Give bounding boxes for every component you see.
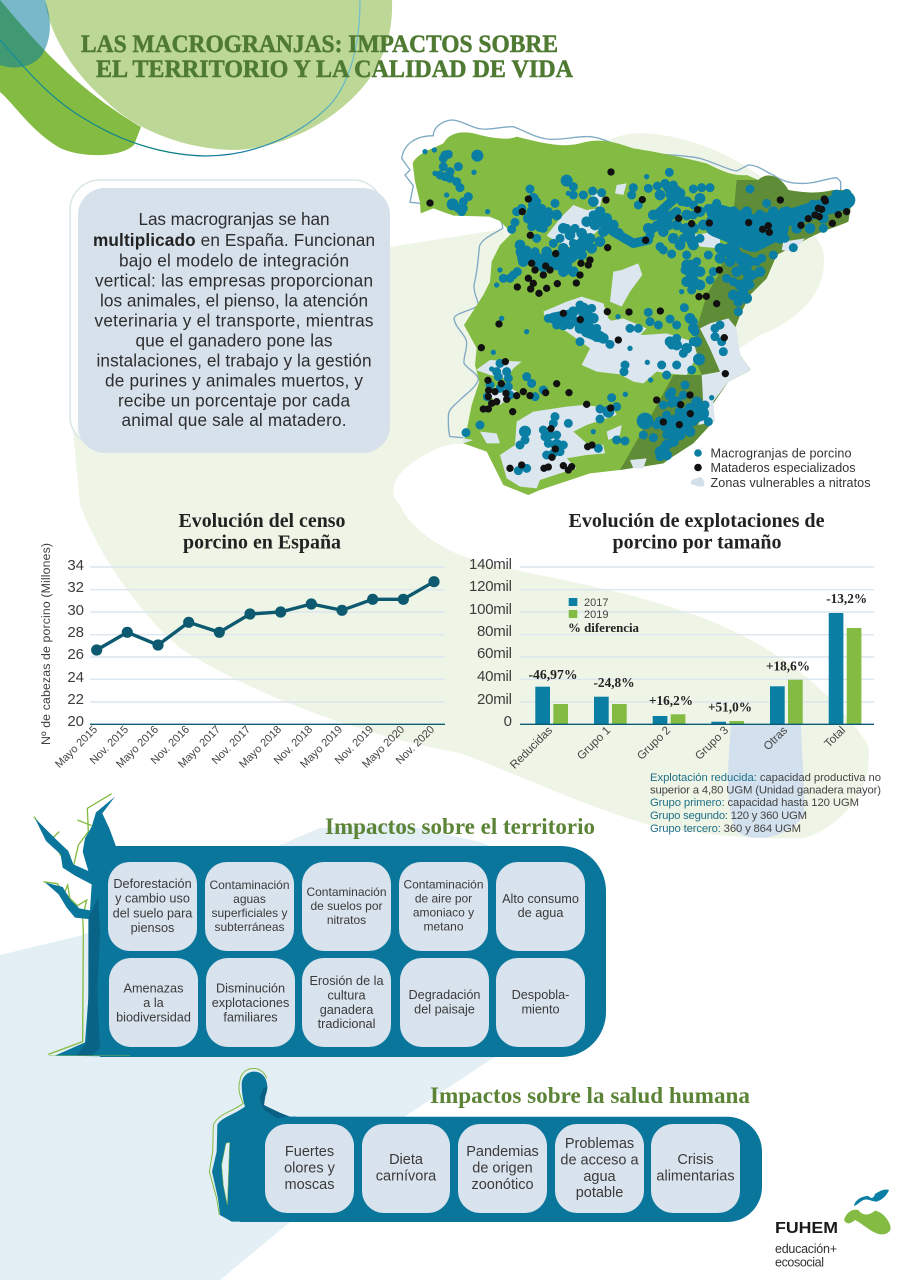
card <box>109 958 198 1047</box>
logo: FUHEM: ecosocial <box>775 1256 824 1270</box>
panel: intro text: bajo el modelo de integración <box>119 250 349 270</box>
y axis labels: 120mil <box>469 578 512 595</box>
heading: impacts on human health: Impactos sobre la salud humana <box>430 1083 750 1109</box>
title: LAS MACROGRANJAS: IMPACTOS SOBRE <box>81 29 558 58</box>
map: slaughterhouse dots <box>430 172 847 470</box>
card <box>399 862 488 951</box>
card <box>108 862 197 951</box>
x axis labels: Total <box>822 725 848 750</box>
card: agua <box>583 1169 617 1185</box>
x axis labels: Nov. 2018 <box>272 724 315 767</box>
card: de aire por <box>415 892 472 906</box>
percentage labels: +51,0% <box>708 700 752 716</box>
card: tradicional <box>318 1017 375 1031</box>
map: coast line <box>402 120 841 438</box>
bar chart heading: Evolución de explotaciones de <box>568 510 825 532</box>
icon: logo mark <box>844 1189 891 1234</box>
y axis labels: 100mil <box>469 601 512 618</box>
card <box>400 958 489 1047</box>
y axis labels: 40mil <box>477 668 512 685</box>
y axis labels: 34 <box>67 557 84 574</box>
card: familiares <box>223 1011 278 1025</box>
y axis labels: 0 <box>504 713 512 730</box>
legend: 2017 <box>584 597 608 609</box>
title <box>81 29 574 83</box>
card: del paisaje <box>414 1002 475 1016</box>
line chart heading: Evolución del censo <box>178 510 346 532</box>
card: zoonótico <box>471 1177 534 1193</box>
line chart: pig census <box>39 543 445 771</box>
card <box>496 862 585 951</box>
x axis labels: Nov. 2019 <box>333 724 376 767</box>
card: de origen <box>472 1161 533 1177</box>
background: pale green blob <box>73 133 869 838</box>
card <box>651 1124 740 1213</box>
card: a la <box>143 996 165 1010</box>
panel: intro text: de purines y animales muertos, y <box>105 370 363 390</box>
card <box>555 1124 644 1213</box>
card: Contaminación <box>403 878 484 892</box>
percentage labels: -24,8% <box>594 676 634 691</box>
percentage labels: +16,2% <box>649 694 693 709</box>
definitions note: superior a 4,80 UGM (Unidad ganadera mayor) <box>650 784 881 796</box>
card: superficiales y <box>211 906 288 920</box>
card: carnívora <box>376 1169 437 1185</box>
card: subterráneas <box>214 920 285 934</box>
card: piensos <box>131 921 174 935</box>
card: de agua <box>518 906 564 920</box>
y axis labels: 20 <box>67 713 84 730</box>
logo: FUHEM: FUHEM <box>775 1220 838 1237</box>
y axis labels: 26 <box>67 646 84 663</box>
card: Degradación <box>409 988 480 1002</box>
card: olores y <box>284 1161 336 1177</box>
bars <box>535 613 843 724</box>
y axis labels: 140mil <box>469 556 512 573</box>
definitions note <box>650 772 881 835</box>
card: Fuertes <box>285 1144 334 1160</box>
card: nitratos <box>327 913 366 927</box>
card <box>496 958 585 1047</box>
y axis labels <box>469 556 512 730</box>
card: miento <box>521 1002 560 1016</box>
x axis labels: Grupo 1 <box>575 725 613 763</box>
x axis labels: Nov. 2015 <box>88 724 131 767</box>
card: Erosión de la <box>309 974 384 988</box>
x axis labels: Mayo 2018 <box>237 724 284 771</box>
card: Contaminación <box>306 885 387 899</box>
card: Pandemias <box>466 1144 539 1160</box>
card: alimentarias <box>656 1169 735 1185</box>
y axis labels: 20mil <box>477 691 512 708</box>
panel: intro text: animal que sale al matadero. <box>122 410 346 430</box>
card: Amenazas <box>124 982 183 996</box>
card: Problemas <box>565 1136 634 1152</box>
y axis labels: 80mil <box>477 623 512 640</box>
y axis labels: 28 <box>67 624 84 641</box>
panel: intro text: recibe un porcentaje por cada <box>118 390 350 410</box>
percentage labels: -13,2% <box>826 592 867 607</box>
y axis labels: 30 <box>67 602 84 619</box>
x axis labels <box>508 724 848 772</box>
card: explotaciones <box>212 996 289 1010</box>
definitions note: Grupo segundo: 120 y 360 UGM <box>650 810 807 822</box>
data line <box>91 576 440 656</box>
card: de suelos por <box>310 899 383 913</box>
bar chart: farms by size <box>469 556 874 772</box>
percentage labels: +18,6% <box>766 660 810 674</box>
panel: impacts on human health <box>209 1068 762 1222</box>
x axis labels: Nov. 2016 <box>149 724 192 767</box>
y axis labels <box>67 557 84 730</box>
map: Spain macrofarms <box>402 120 853 495</box>
card <box>206 958 295 1047</box>
y axis labels: 60mil <box>477 645 512 662</box>
map: macrofarm mass <box>425 150 847 471</box>
map: nitrate zones <box>463 183 805 488</box>
card: moscas <box>285 1177 334 1193</box>
card <box>458 1124 547 1213</box>
card <box>265 1124 354 1213</box>
panel: intro text: que el ganadero pone las <box>136 330 332 350</box>
panel: intro text: multiplicado en España. Funcionan <box>93 230 375 250</box>
card: potable <box>576 1185 623 1201</box>
map: macrofarm dots <box>440 154 847 471</box>
panel: intro text: vertical: las empresas proporcionan <box>95 270 373 290</box>
definitions note: Explotación reducida: capacidad productiva no <box>650 772 881 784</box>
map: darker green zone <box>620 176 853 470</box>
x axis labels: Nov. 2020 <box>394 724 437 767</box>
card: aguas <box>233 892 266 906</box>
y axis labels: 32 <box>67 579 84 596</box>
card: Deforestación <box>113 877 192 891</box>
x axis labels: Mayo 2017 <box>176 724 223 771</box>
background: pale blue blob <box>0 824 605 1280</box>
panel: intro text: veterinaria y el transporte, mientras <box>94 310 374 330</box>
card: Alto consumo <box>502 892 579 906</box>
card: y cambio uso <box>115 892 190 906</box>
line chart heading <box>178 510 346 554</box>
card: del suelo para <box>113 906 193 920</box>
title: EL TERRITORIO Y LA CALIDAD DE VIDA <box>96 54 574 83</box>
card <box>205 862 294 951</box>
card: Dieta <box>389 1152 423 1168</box>
card: amoniaco y <box>413 906 474 920</box>
map: land <box>413 132 853 495</box>
panel: intro text: los animales, el pienso, la atención <box>100 290 368 310</box>
panel: intro text: Las macrogranjas se han <box>138 209 330 229</box>
card: de acceso a <box>560 1152 640 1168</box>
x axis labels: Nov. 2017 <box>210 724 253 767</box>
x axis labels: Reducidas <box>508 724 555 772</box>
panel: impacts on territory <box>34 794 606 1057</box>
x axis labels <box>53 724 437 771</box>
card: metano <box>423 920 464 934</box>
panel: intro text: instalaciones, el trabajo y la gestión <box>96 350 372 370</box>
bar chart heading <box>568 510 825 554</box>
decoration: blue wave under bar chart <box>728 725 804 838</box>
y axis labels: 22 <box>67 691 84 708</box>
x axis labels: Grupo 3 <box>693 725 731 763</box>
icon: dead tree <box>34 794 130 1057</box>
legend: % diferencia <box>568 620 639 635</box>
card: Crisis <box>677 1152 714 1168</box>
card: ganadera <box>320 1003 374 1017</box>
card: Disminución <box>216 982 285 996</box>
card <box>302 958 391 1047</box>
x axis labels: Otras <box>762 724 790 753</box>
x axis labels: Mayo 2016 <box>114 724 161 771</box>
icon: human silhouette <box>209 1068 297 1222</box>
card: Despobla- <box>512 988 569 1002</box>
x axis labels: Grupo 2 <box>635 725 673 763</box>
map legend: Macrogranjas de porcino <box>710 446 852 460</box>
decoration: header blobs <box>0 0 392 156</box>
y axis title: Nº de cabezas de porcino (Millones) <box>39 543 53 745</box>
legend <box>568 597 639 635</box>
logo: FUHEM <box>775 1189 891 1270</box>
map legend: Zonas vulnerables a nitratos <box>710 476 870 490</box>
bar chart heading: porcino por tamaño <box>612 532 782 554</box>
definitions note: Grupo primero: capacidad hasta 120 UGM <box>650 797 859 809</box>
map legend <box>691 446 870 490</box>
card: biodiversidad <box>116 1011 191 1025</box>
x axis labels: Mayo 2019 <box>298 724 345 771</box>
legend: 2019 <box>584 609 608 621</box>
percentage labels: -46,97% <box>528 668 578 683</box>
definitions note: Grupo tercero: 360 y 864 UGM <box>650 823 801 835</box>
y axis labels: 24 <box>67 669 84 686</box>
card: Contaminación <box>209 878 290 892</box>
line chart heading: porcino en España <box>183 532 341 554</box>
card <box>362 1124 450 1213</box>
map legend: Mataderos especializados <box>710 461 856 475</box>
x axis labels: Mayo 2020 <box>360 724 407 771</box>
card <box>302 862 391 951</box>
logo: FUHEM: educación+ <box>775 1242 837 1256</box>
heading: impacts on territory: Impactos sobre el territorio <box>325 814 595 840</box>
percentage labels <box>528 592 867 716</box>
panel: intro text <box>70 180 390 453</box>
card: cultura <box>327 988 366 1002</box>
x axis labels: Mayo 2015 <box>53 724 100 771</box>
